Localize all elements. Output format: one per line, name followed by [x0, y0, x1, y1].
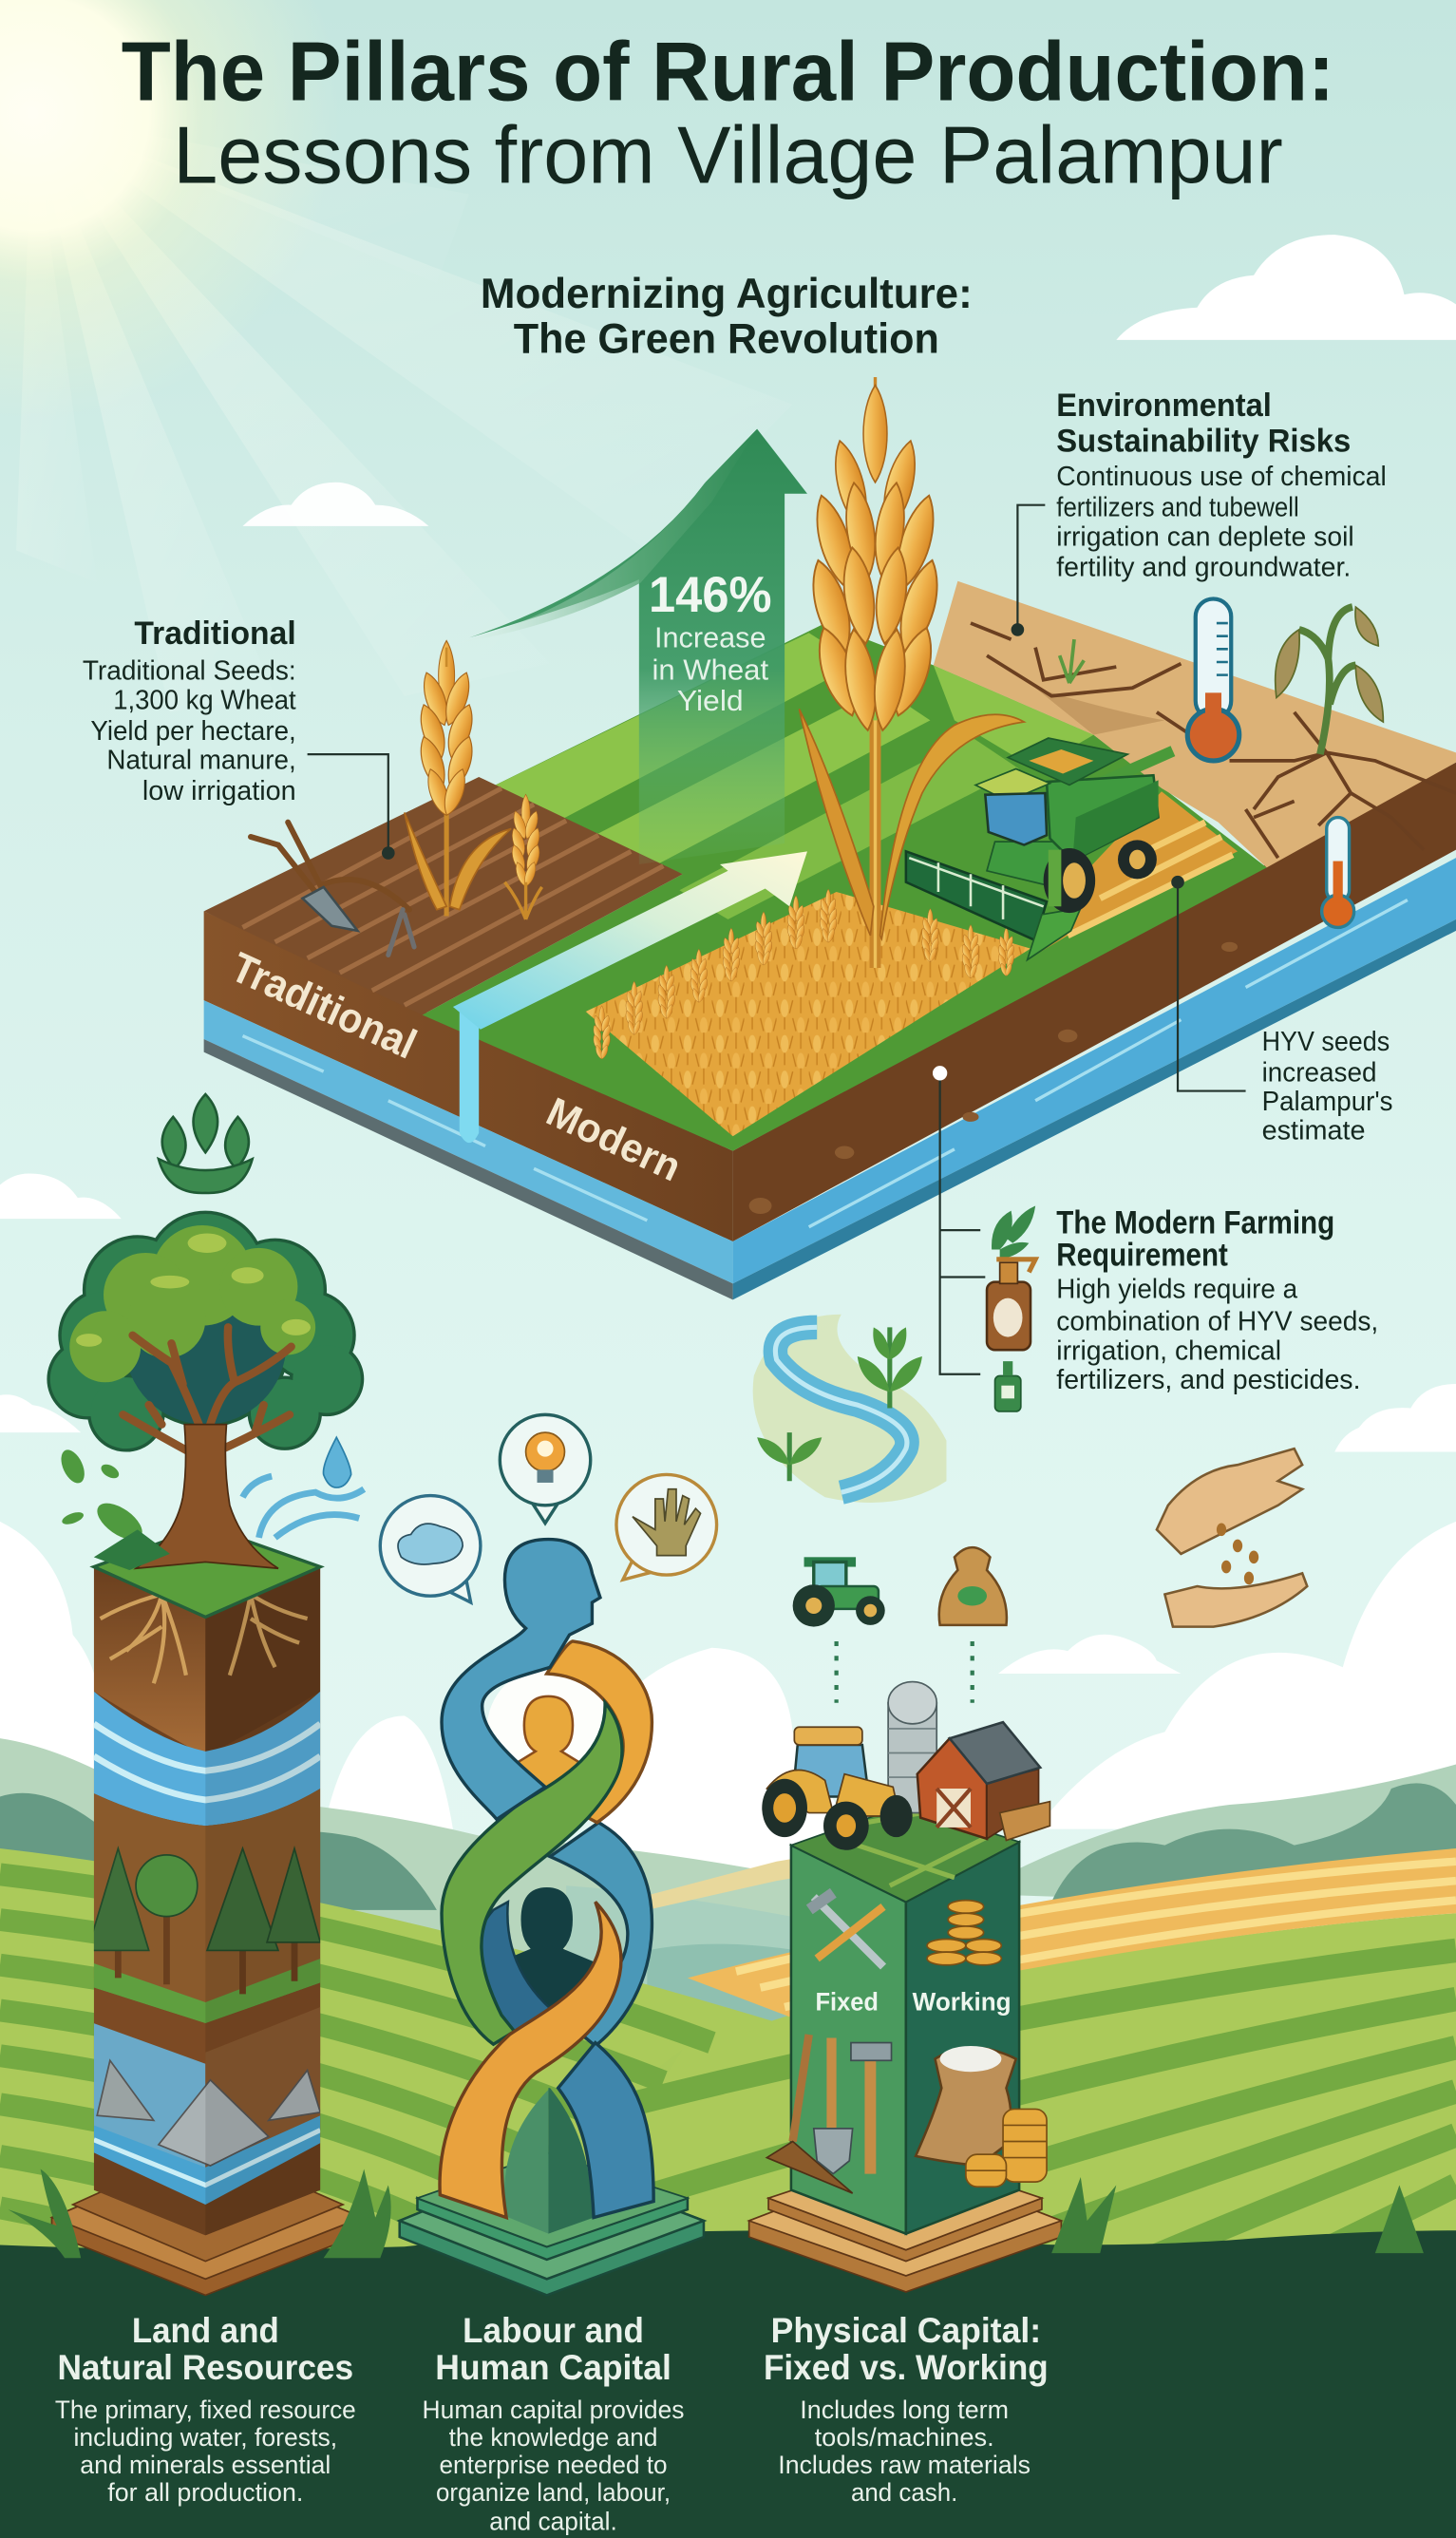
platform left side — [204, 911, 733, 1299]
large wheat stalk — [799, 377, 1024, 968]
growth arrow: 146% increase: 146% — [649, 567, 771, 623]
plinth — [400, 2152, 704, 2295]
thermometer large — [1187, 599, 1239, 761]
icon: seed bag — [939, 1547, 1007, 1625]
dotted connectors — [837, 1641, 973, 1703]
callout: modern farming requirement: The Modern Farming — [1056, 1205, 1334, 1241]
caption: physical capital: Includes raw materials — [778, 2450, 1031, 2479]
plough icon — [251, 823, 414, 955]
green ribbon — [442, 1703, 622, 2044]
callout: environmental sustainability risks — [1012, 388, 1387, 636]
blue ribbon lower back — [473, 1823, 653, 2218]
isometric farm platform — [204, 581, 1456, 1299]
caption: physical capital: Includes long term — [800, 2395, 1009, 2424]
caption: labour and human capital: Human capital provides — [423, 2395, 685, 2424]
farm fields — [0, 1848, 1456, 2492]
growth arrow: 146% increase: Yield — [677, 685, 744, 717]
harvest stripe — [1035, 791, 1238, 955]
callout: traditional: Natural manure, — [106, 745, 296, 775]
callout: traditional: low irrigation — [142, 776, 296, 806]
callout: traditional: Yield per hectare, — [90, 716, 296, 747]
traditional soil plot — [204, 777, 683, 1014]
pillar 2: labour and human capital — [380, 1414, 717, 2295]
section heading: green revolution — [481, 271, 973, 362]
caption: labour and human capital: enterprise needed to — [439, 2450, 668, 2479]
barn — [917, 1722, 1049, 1841]
callout: HYV seeds: Palampur's — [1262, 1087, 1393, 1117]
banner labels on platform: Modern — [539, 1089, 688, 1190]
silo — [888, 1682, 936, 1813]
tree — [50, 1214, 361, 1568]
pillar 1: land and natural resources — [50, 1214, 364, 2295]
caption: land and natural resources: including water, forests, — [74, 2422, 337, 2452]
sun and rays — [0, 0, 793, 712]
section heading: green revolution: The Green Revolution — [514, 315, 939, 362]
green modern field — [423, 623, 1267, 1151]
thought bubble: hand — [616, 1474, 717, 1580]
background clouds — [0, 235, 1456, 1885]
icon: leaf sprig — [992, 1206, 1035, 1260]
callout: environmental sustainability risks: Sustainability Risks — [1056, 423, 1351, 459]
silhouette lower person — [492, 1887, 602, 2017]
caption: labour and human capital: Labour and — [463, 2310, 644, 2350]
callout: traditional: Traditional Seeds: — [83, 656, 296, 687]
callout: HYV seeds: increased — [1262, 1057, 1377, 1088]
caption: land and natural resources: Land and — [132, 2310, 279, 2350]
green column — [791, 1805, 1019, 2234]
icon: small tractor — [793, 1557, 885, 1627]
banner labels on platform — [224, 944, 688, 1190]
banner labels on platform: Traditional — [224, 944, 423, 1069]
grass top — [94, 1526, 320, 1617]
callout: HYV seeds: HYV seeds — [1262, 1027, 1390, 1057]
water splash and drop — [243, 1437, 364, 1538]
stack of coins — [927, 1901, 1001, 1965]
callout: modern farming requirement — [933, 1066, 1378, 1395]
thought bubble: idea — [500, 1414, 591, 1524]
orange ribbon lower — [440, 1902, 621, 2218]
caption: physical capital: tools/machines. — [815, 2422, 994, 2452]
callout: traditional: 1,300 kg Wheat — [113, 685, 296, 715]
callout: HYV seeds — [1171, 876, 1393, 1146]
traditional wheat plants — [405, 640, 542, 919]
grass tufts — [9, 2169, 1424, 2258]
orange ribbon upper — [547, 1641, 652, 1823]
growth arrow: 146% increase: Increase — [654, 622, 766, 654]
thermometer small — [1322, 818, 1354, 927]
dark ground — [0, 2230, 1456, 2538]
caption: land and natural resources: and minerals essential — [80, 2450, 331, 2479]
callout: HYV seeds: estimate — [1262, 1116, 1366, 1146]
fixed and working labels: Working — [913, 1986, 1012, 2016]
callout: modern farming requirement: fertilizers, and pesticides. — [1056, 1365, 1361, 1395]
callout: traditional: Traditional — [134, 616, 296, 652]
hole sky — [487, 1667, 610, 1790]
inner core — [504, 2088, 594, 2234]
icon: pesticide bottle — [995, 1361, 1021, 1411]
plinth — [749, 2152, 1061, 2292]
section heading: green revolution: Modernizing Agriculture: — [481, 271, 973, 317]
soil and water column — [87, 1554, 322, 2242]
callout: environmental sustainability risks: fertility and groundwater. — [1056, 553, 1351, 583]
caption: labour and human capital: organize land, labour, — [436, 2477, 671, 2507]
caption: physical capital: Physical Capital: — [771, 2310, 1041, 2350]
icon: river with plants — [753, 1315, 946, 1503]
canopy — [50, 1214, 361, 1449]
caption: land and natural resources: Natural Resources — [57, 2347, 353, 2387]
caption: land and natural resources: The primary, fixed resource — [55, 2395, 356, 2424]
base plinth — [52, 2145, 363, 2295]
title — [122, 25, 1334, 201]
caption: labour and human capital — [423, 2310, 685, 2535]
title: The Pillars of Rural Production: — [122, 25, 1334, 119]
callout: modern farming requirement: irrigation, chemical — [1056, 1335, 1281, 1366]
title: Lessons from Village Palampur — [173, 111, 1283, 201]
callout: environmental sustainability risks: Continuous use of chemical — [1056, 462, 1387, 492]
blue ribbon upper with head — [442, 1540, 600, 1819]
caption: labour and human capital: and capital. — [489, 2506, 617, 2535]
coin stacks foreground — [966, 2109, 1047, 2187]
grain sack — [916, 2046, 1016, 2166]
caption: labour and human capital: Human Capital — [435, 2347, 671, 2387]
callout: environmental sustainability risks: Environmental — [1056, 388, 1272, 424]
caption: physical capital: Fixed vs. Working — [764, 2347, 1049, 2387]
pillar 3: physical capital — [749, 1682, 1061, 2292]
caption: physical capital — [764, 2310, 1049, 2507]
dry cracked land — [934, 581, 1456, 867]
tractor on pillar — [762, 1727, 913, 1850]
wheat field — [586, 889, 1031, 1136]
combine harvester — [906, 738, 1173, 960]
leaves near tree — [56, 1447, 170, 1570]
callout: traditional — [83, 616, 395, 860]
silhouette upper person — [515, 1696, 582, 1790]
caption: labour and human capital: the knowledge and — [449, 2422, 657, 2452]
caption: physical capital: and cash. — [851, 2477, 957, 2507]
fixed and working labels — [815, 1986, 1012, 2016]
platform right side — [733, 763, 1456, 1299]
diagonal flow arrow — [453, 851, 807, 1030]
thought bubble: cloud — [380, 1496, 481, 1602]
callout: modern farming requirement: Requirement — [1056, 1238, 1228, 1274]
callout: environmental sustainability risks: irrigation can deplete soil — [1056, 521, 1354, 552]
fixed tools — [766, 1888, 892, 2193]
icon: manure bottle — [987, 1260, 1035, 1350]
growth arrow: 146% increase — [453, 429, 807, 864]
callout: modern farming requirement: High yields require a — [1056, 1275, 1298, 1305]
water channel — [460, 1012, 479, 1143]
icon: leaves emblem — [159, 1094, 253, 1193]
caption: land and natural resources: for all production. — [107, 2477, 303, 2507]
wilting plant — [1276, 607, 1383, 754]
fixed and working labels: Fixed — [815, 1986, 879, 2016]
distant hills — [0, 1738, 1456, 2039]
icon: hands sowing seeds — [1157, 1449, 1307, 1627]
callout: modern farming requirement: combination of HYV seeds, — [1056, 1307, 1378, 1337]
trunk and branches — [123, 1327, 292, 1568]
growth arrow: 146% increase: in Wheat — [652, 654, 769, 687]
callout: environmental sustainability risks: fertilizers and tubewell — [1056, 493, 1299, 523]
caption: land and natural resources — [55, 2310, 356, 2507]
